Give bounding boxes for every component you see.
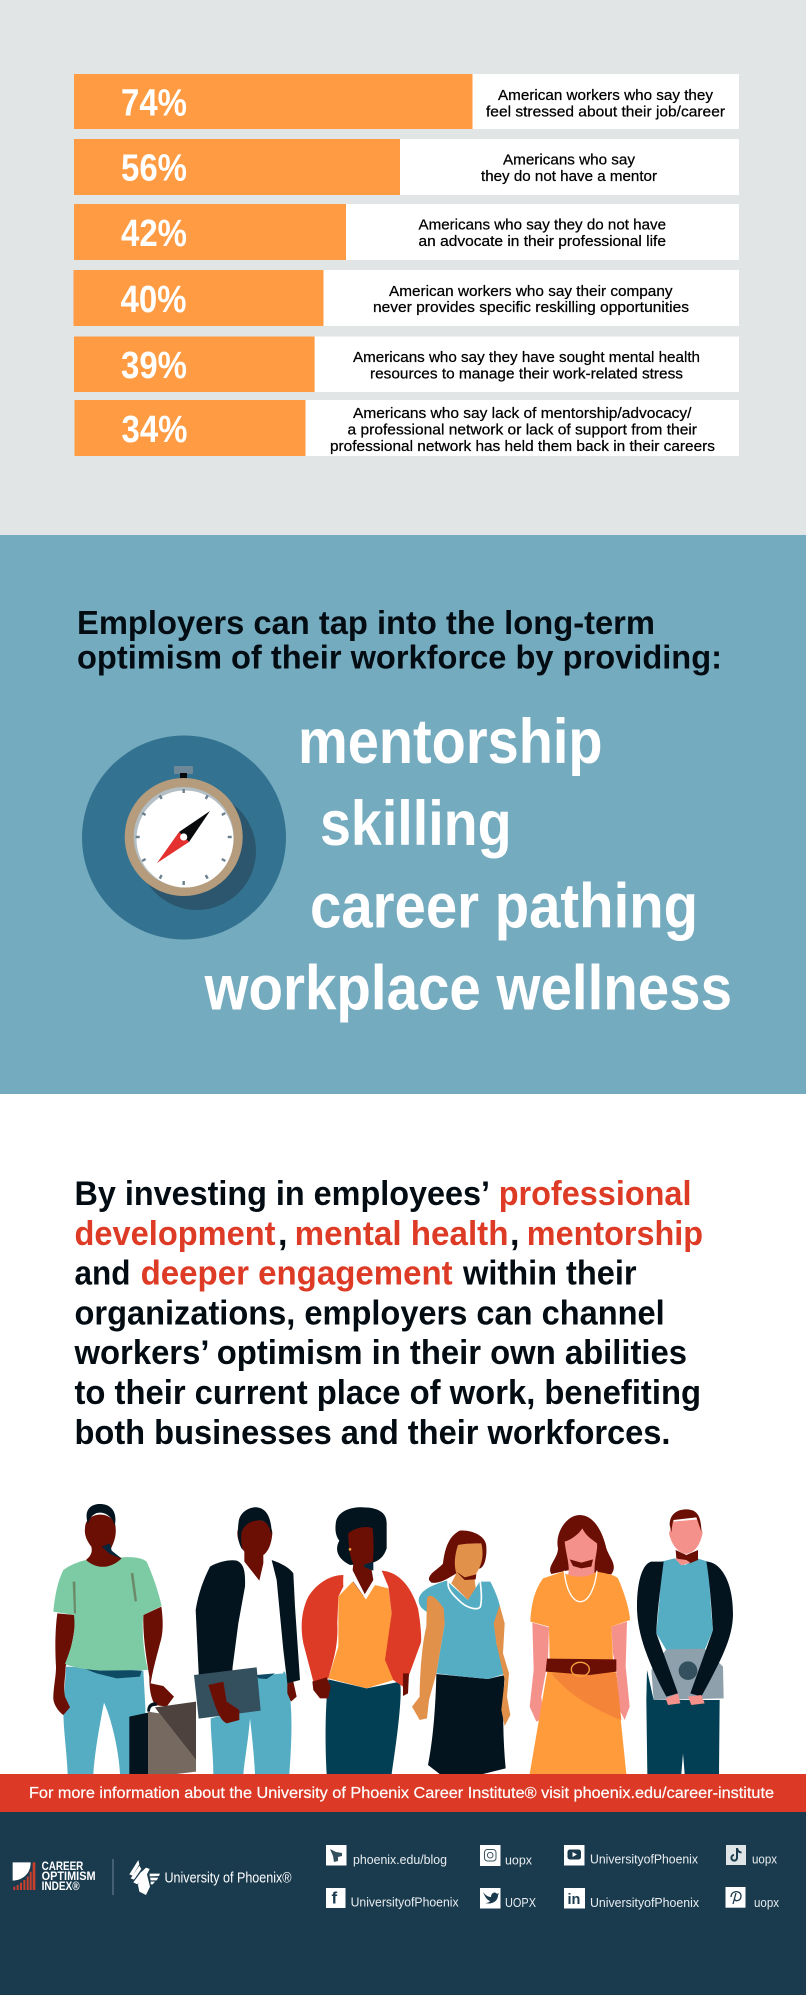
stat row: 42%: 42% bbox=[121, 213, 187, 255]
social links bbox=[326, 1845, 780, 1910]
statement text: , bbox=[510, 1215, 519, 1253]
stat row: 34%: a professional network or lack of support from their bbox=[348, 422, 697, 438]
illustration: people bbox=[53, 1504, 733, 1774]
stat row: 42%: Americans who say they do not have bbox=[418, 217, 666, 234]
list of offerings: workplace wellness bbox=[204, 954, 732, 1024]
list of offerings: career pathing bbox=[310, 872, 698, 942]
social: pinterest: uopx bbox=[754, 1896, 780, 1910]
stat row: 74%: 74% bbox=[121, 82, 187, 124]
social: blog bbox=[326, 1845, 447, 1867]
icon: stopwatch bbox=[82, 736, 286, 940]
social: facebook: UniversityofPhoenix bbox=[351, 1896, 459, 1910]
person: woman in red cardigan bbox=[302, 1507, 421, 1774]
stat row: 74%: American workers who say they bbox=[498, 87, 714, 104]
stat row: 39% bbox=[74, 336, 739, 392]
panel: statistics bbox=[0, 0, 806, 535]
social: facebook bbox=[326, 1888, 459, 1910]
social: blog: phoenix.edu/blog bbox=[353, 1853, 447, 1867]
heading: optimism of their workforce by providing: bbox=[77, 639, 722, 676]
statement text: workers’ optimism in their own abilities bbox=[74, 1334, 687, 1372]
statement text: professional bbox=[499, 1175, 692, 1213]
statement text: mental health bbox=[295, 1215, 508, 1253]
heading bbox=[77, 604, 722, 676]
statement text: development bbox=[74, 1215, 276, 1253]
stat row: 42%: an advocate in their professional life bbox=[418, 233, 666, 250]
statement text: mentorship bbox=[527, 1215, 703, 1253]
logo: Career Optimism Index: OPTIMISM bbox=[42, 1871, 96, 1883]
divider bbox=[112, 1859, 114, 1895]
stat row: 40% bbox=[74, 270, 739, 326]
statement text bbox=[74, 1175, 703, 1452]
statement text: within their bbox=[462, 1254, 637, 1292]
statement text: deeper engagement bbox=[141, 1254, 453, 1292]
stat row: 40%: 40% bbox=[120, 279, 186, 321]
statement text: to their current place of work, benefiting bbox=[74, 1374, 701, 1412]
social: youtube: UniversityofPhoenix bbox=[590, 1853, 699, 1867]
heading: Employers can tap into the long-term bbox=[77, 604, 655, 641]
social: instagram: uopx bbox=[505, 1854, 533, 1868]
stat row: 42% bbox=[74, 204, 739, 260]
person: man in black jacket with tablet bbox=[194, 1507, 300, 1774]
social: linkedin: UniversityofPhoenix bbox=[590, 1896, 700, 1910]
stat row: 56% bbox=[74, 139, 739, 195]
statement text: , bbox=[278, 1215, 287, 1253]
logo: Career Optimism Index: INDEX® bbox=[42, 1881, 80, 1893]
list of offerings: skilling bbox=[320, 789, 512, 859]
social: facebook: f bbox=[332, 1888, 338, 1908]
statement text: By investing in employees’ bbox=[74, 1175, 490, 1213]
social: instagram bbox=[480, 1845, 533, 1868]
stat row: 40%: American workers who say their company bbox=[389, 283, 673, 300]
stat row: 34%: 34% bbox=[122, 409, 188, 451]
list of offerings bbox=[204, 707, 732, 1024]
banner: more information: For more information about the University of Phoenix Career Institute® visit phoenix.edu/career-institute bbox=[29, 1785, 774, 1802]
social: twitter: UOPX bbox=[505, 1896, 537, 1910]
list of offerings: mentorship bbox=[298, 707, 603, 777]
banner: more information bbox=[0, 1774, 806, 1812]
stat row: 34%: Americans who say lack of mentorship/advocacy/ bbox=[353, 405, 692, 422]
social: linkedin bbox=[564, 1888, 700, 1910]
stat row: 39%: Americans who say they have sought mental health bbox=[353, 349, 700, 366]
panel: investing statement bbox=[0, 1094, 806, 1774]
stat row: 34% bbox=[74, 400, 739, 456]
panel: employers bbox=[0, 535, 806, 1094]
statement text: and bbox=[74, 1254, 130, 1292]
stat row: 34%: professional network has held them back in their careers bbox=[330, 438, 715, 455]
person: man with laptop bbox=[637, 1509, 733, 1774]
social: tiktok: uopx bbox=[752, 1853, 778, 1867]
social: youtube bbox=[564, 1845, 699, 1867]
statement text: organizations, employers can channel bbox=[74, 1294, 665, 1332]
panel: footer bbox=[0, 1812, 806, 1995]
logo: Career Optimism Index: CAREER bbox=[42, 1861, 84, 1873]
stat row: 56%: 56% bbox=[121, 148, 187, 190]
person: man in green shirt with briefcase bbox=[53, 1504, 196, 1774]
stat row: 74%: feel stressed about their job/career bbox=[486, 104, 725, 120]
social: tiktok bbox=[726, 1845, 778, 1867]
social: linkedin: in bbox=[568, 1892, 580, 1908]
social: pinterest bbox=[726, 1887, 780, 1910]
logo: University of Phoenix bbox=[129, 1860, 292, 1895]
stat row: 56%: Americans who say bbox=[503, 152, 635, 168]
stat row: 74% bbox=[74, 74, 739, 129]
logo: Career Optimism Index bbox=[13, 1861, 96, 1893]
stat row: 39%: resources to manage their work-related stress bbox=[370, 366, 683, 383]
stat row: 40%: never provides specific reskilling opportunities bbox=[373, 299, 689, 316]
stat row: 39%: 39% bbox=[121, 345, 187, 387]
logo: University of Phoenix: University of Phoenix® bbox=[164, 1870, 292, 1887]
person: woman in orange dress bbox=[530, 1515, 630, 1774]
person: woman in blue top and black skirt bbox=[412, 1530, 510, 1774]
social: twitter bbox=[480, 1888, 537, 1910]
statement text: both businesses and their workforces. bbox=[74, 1414, 670, 1452]
stat row: 56%: they do not have a mentor bbox=[481, 168, 657, 185]
